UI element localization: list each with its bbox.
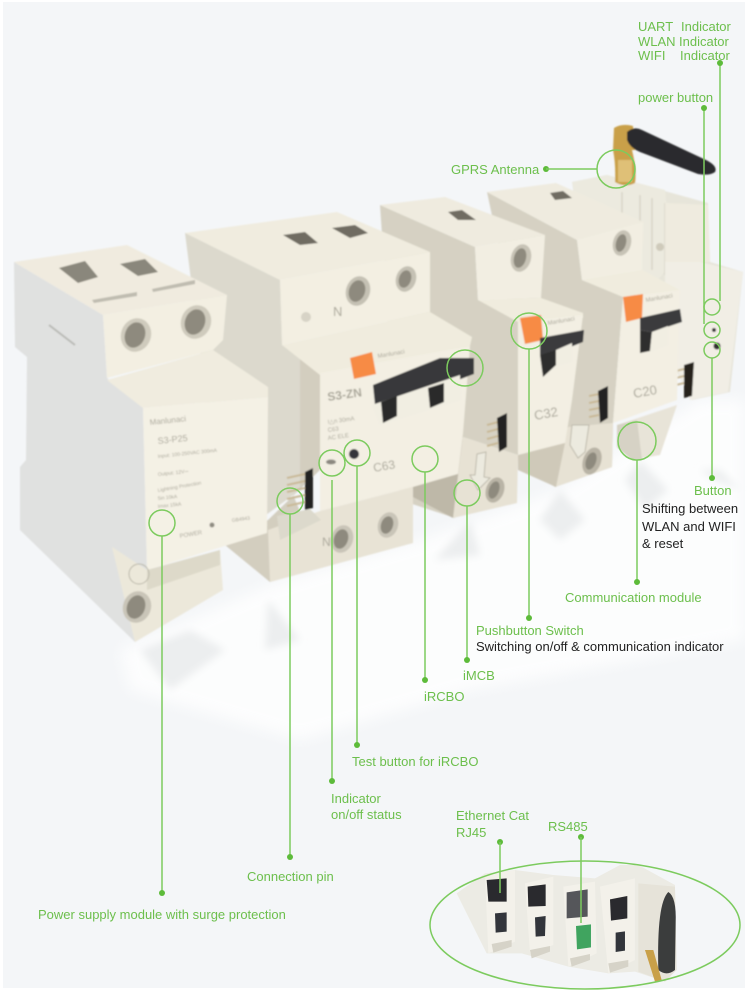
annotation: iRCBO (412, 446, 464, 704)
annotation: indicator on/off (319, 450, 402, 822)
module 3: iMCB breaker (380, 197, 584, 518)
annotation: connection pin: Connection pin (247, 869, 334, 884)
annotation: iRCBO: iRCBO (424, 689, 464, 704)
module 1: power supply S3-P25: POWER (179, 530, 203, 540)
label: Ethernet (456, 808, 529, 893)
module 1: power supply S3-P25: Imax 15kA (158, 501, 182, 510)
annotation: indicator on/off: Indicator (331, 791, 382, 806)
module 2: iRCBO breaker: AC ELE (327, 433, 349, 442)
label: Ethernet: RJ45 (456, 825, 486, 840)
annotation: communication module: Communication module (565, 590, 702, 605)
module 4: iMCB breaker: C20 (632, 382, 658, 401)
module 2: iRCBO breaker: C63 (372, 457, 397, 475)
module 2: iRCBO breaker: Manlunaci (377, 349, 405, 360)
annotation: power button: power button (638, 90, 713, 105)
annotation: iMCB: iMCB (463, 668, 495, 683)
annotation: indicators: WLAN (638, 34, 676, 49)
GPRS antenna (613, 125, 716, 185)
annotation: power supply module (38, 510, 286, 922)
label: Ethernet: Ethernet Cat (456, 808, 529, 823)
module 2: iRCBO breaker: N (333, 304, 342, 319)
annotation: reset button: & reset (642, 536, 684, 551)
annotation: power supply module: Power supply module with surge protection (38, 907, 286, 922)
annotation: test button: Test button for iRCBO (352, 754, 478, 769)
module 1: power supply S3-P25: Lightning Protection (157, 480, 202, 494)
module 2: iRCBO breaker (185, 212, 474, 582)
module 1: power supply S3-P25: 5in 10kA (158, 494, 178, 502)
module 4: iMCB breaker: Manlunaci (645, 293, 673, 304)
floor reflections (120, 400, 745, 740)
annotation: GPRS antenna: GPRS Antenna (451, 162, 540, 177)
module 3: iMCB breaker: C32 (533, 404, 559, 423)
module 4: iMCB breaker (487, 183, 682, 487)
annotation: indicator on/off: on/off status (331, 807, 402, 822)
annotation: communication module (565, 422, 702, 605)
annotation: iMCB (454, 480, 495, 683)
module 2: iRCBO breaker: I△n 30mA (327, 416, 355, 426)
inset ports photo (457, 865, 677, 982)
annotation: test button (344, 440, 478, 769)
module 2: iRCBO breaker: S3-ZN (326, 385, 363, 404)
annotation: handle circle (447, 350, 483, 386)
label: RS485 (548, 819, 588, 923)
module 1: power supply S3-P25: Manlunaci (149, 414, 187, 427)
annotation: reset button (642, 342, 738, 551)
annotation: indicators (638, 19, 732, 315)
module 1: power supply S3-P25: Input: 100-250VAC 300mA (158, 448, 218, 460)
annotation: reset button: Shifting between (642, 501, 738, 516)
annotation: GPRS antenna (451, 150, 635, 188)
module 1: power supply S3-P25: Output: 12V⎓ (158, 469, 189, 478)
annotation: indicators: UART (638, 19, 673, 34)
annotation: indicators: Indicator (680, 48, 731, 63)
inset: communication ports in ellipse (430, 808, 740, 989)
module 1: power supply S3-P25 (14, 245, 268, 642)
annotation: indicators: Indicator (679, 34, 730, 49)
product: five breaker modules (14, 125, 743, 642)
annotation: reset button: Button (694, 483, 732, 498)
annotation: pushbutton switch: Switching on/off & communication indicator (476, 639, 724, 654)
annotation: indicators: Indicator (681, 19, 732, 34)
annotation: power button (638, 90, 720, 338)
module 2: iRCBO breaker: N (322, 535, 331, 549)
annotation: reset button: WLAN and WIFI (642, 519, 736, 534)
module 1: power supply S3-P25: GB4943 (231, 515, 251, 524)
label: RS485: RS485 (548, 819, 588, 834)
module 5: communication module (572, 175, 743, 400)
annotation: connection pin (247, 488, 334, 884)
module 2: iRCBO breaker: C63 (327, 426, 340, 434)
module 1: power supply S3-P25: S3-P25 (157, 433, 188, 446)
module 3: iMCB breaker: Manlunaci (547, 316, 575, 327)
annotation: pushbutton switch: Pushbutton Switch (476, 623, 584, 638)
annotation: indicators: WIFI (638, 48, 665, 63)
annotation: pushbutton switch (476, 313, 724, 654)
